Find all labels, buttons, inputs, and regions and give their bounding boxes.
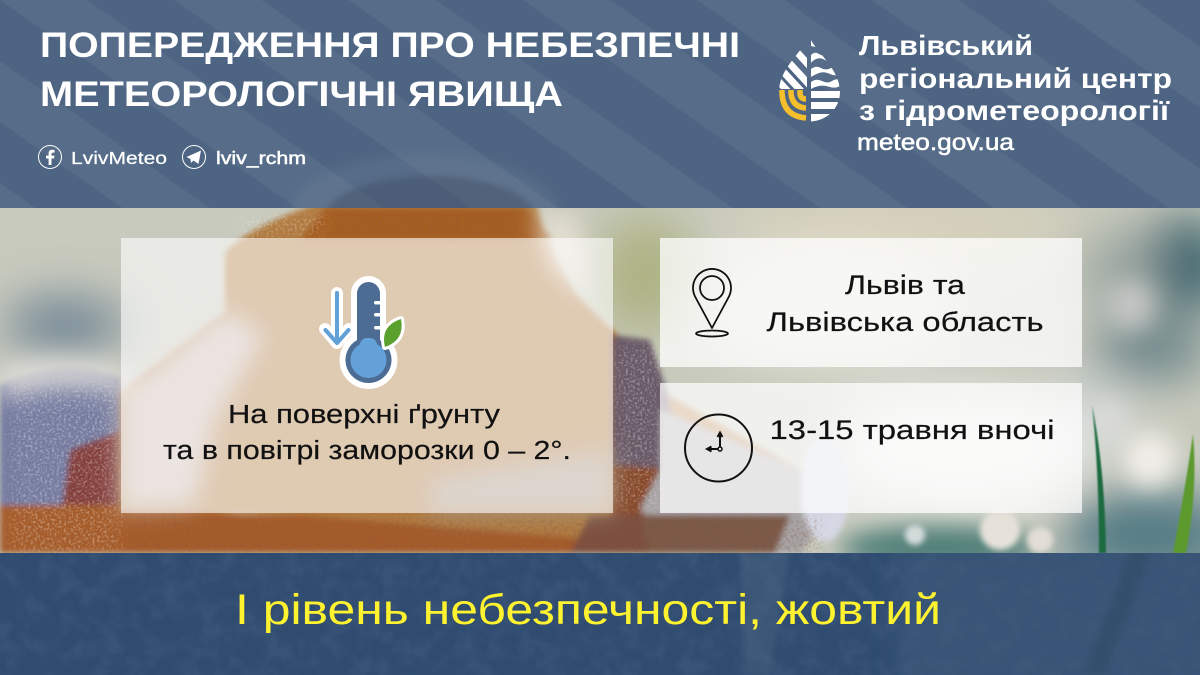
panel: frost warning xyxy=(121,238,613,513)
warning level: І рівень небезпечності, жовтий xyxy=(235,586,941,634)
title xyxy=(40,26,740,114)
text: telegram handle: lviv_rchm xyxy=(216,148,306,169)
grass blades xyxy=(1092,405,1194,553)
text: facebook handle: LvivMeteo xyxy=(71,148,167,168)
header band xyxy=(286,145,558,208)
social links xyxy=(38,146,306,169)
text: frost description: та в повітрі заморозки 0 – 2°. xyxy=(163,437,571,465)
icon: map pin xyxy=(693,269,731,336)
organisation name: Львівський xyxy=(859,30,1033,61)
white waves, right half of drop xyxy=(811,40,840,122)
background photo: frosted leaf xyxy=(0,208,1200,553)
organisation name xyxy=(859,30,1172,126)
icon: telegram xyxy=(182,146,206,168)
icon: thermometer with arrow and leaf xyxy=(325,282,402,383)
leaves xyxy=(0,200,849,553)
yellow signal arcs xyxy=(782,90,806,118)
text: location: Львів та xyxy=(845,270,966,300)
panel: date xyxy=(660,383,1082,513)
logo: hydrometeorological centre drop xyxy=(779,40,840,122)
organisation name: з гідрометеорології xyxy=(859,95,1170,126)
white diagonal stripes, left half of drop xyxy=(779,50,807,89)
title: ПОПЕРЕДЖЕННЯ ПРО НЕБЕЗПЕЧНІ xyxy=(40,26,740,65)
organisation name: регіональний центр xyxy=(859,63,1172,94)
text: frost description: На поверхні ґрунту xyxy=(228,401,500,429)
text: date: 13-15 травня вночі xyxy=(770,415,1054,445)
title: МЕТЕОРОЛОГІЧНІ ЯВИЩА xyxy=(40,75,563,114)
text: location: Львівська область xyxy=(766,307,1044,337)
panel: location xyxy=(660,238,1082,367)
leaf frost grain xyxy=(10,212,820,553)
icon: facebook xyxy=(38,146,62,168)
icon: clock xyxy=(685,414,752,482)
footer band xyxy=(0,540,1200,675)
website: meteo.gov.ua xyxy=(857,129,1014,155)
text: frost description xyxy=(163,401,571,465)
frost patches xyxy=(0,215,612,513)
text: location xyxy=(766,270,1044,337)
